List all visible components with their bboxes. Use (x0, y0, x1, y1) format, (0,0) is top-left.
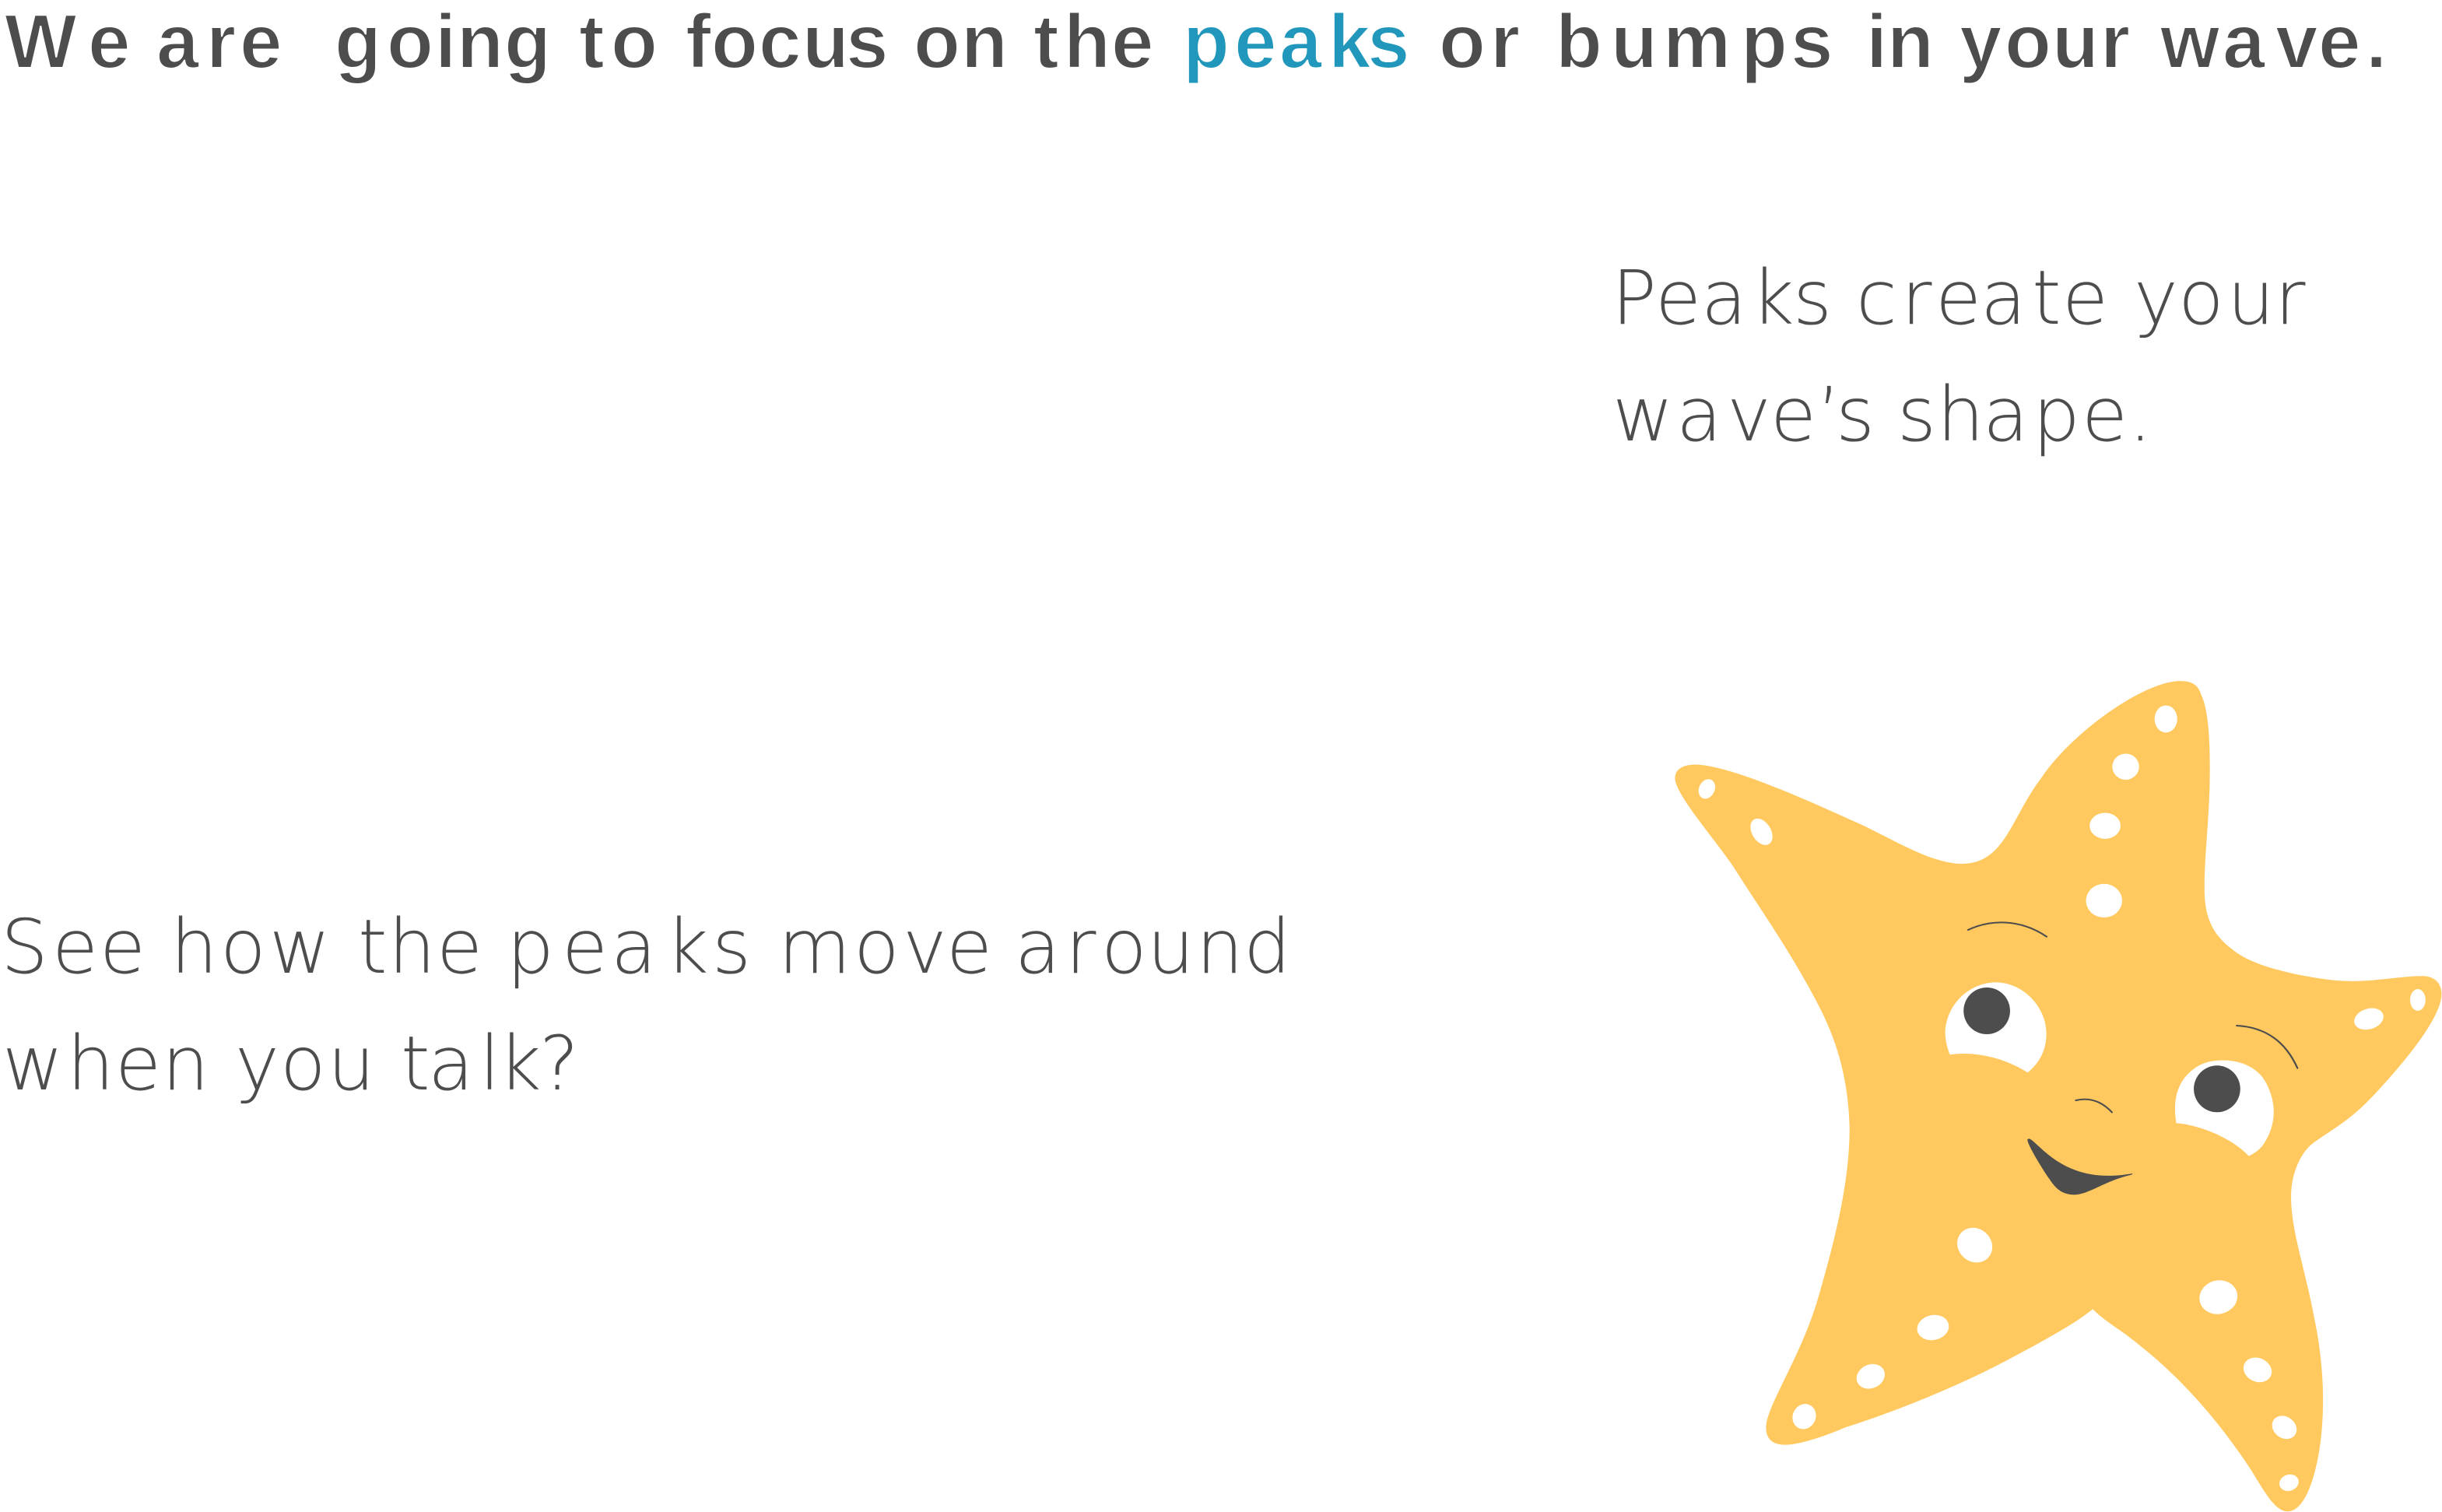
title: bumps (1556, 0, 1833, 84)
title: going (335, 0, 551, 84)
text block: peaks move: See (1, 903, 146, 991)
title: in (1866, 0, 1934, 84)
right eye (2175, 1061, 2274, 1156)
starfish body and spots (1675, 681, 2441, 1511)
text block: peaks move: you (235, 1020, 375, 1107)
text block: peaks move: around (1015, 903, 1291, 991)
text block: peaks create shape: shape. (1897, 371, 2153, 458)
title: We (5, 0, 131, 84)
title: your (1960, 0, 2130, 84)
text block: peaks create shape: wave’s (1612, 371, 1875, 458)
icon: starfish (1675, 681, 2441, 1511)
title: the (1033, 0, 1154, 84)
text block: peaks move: talk? (401, 1020, 579, 1107)
eyebrows and nose (1968, 922, 2297, 1112)
title: to (579, 0, 658, 84)
text block: peaks move: when (2, 1020, 209, 1107)
text block: peaks create shape (1612, 254, 2306, 458)
title: peaks (1183, 0, 1410, 84)
title: or (1439, 0, 1520, 84)
text block: peaks move: peaks (507, 903, 751, 991)
text block: peaks create shape: create (1856, 254, 2108, 342)
title: wave. (2160, 0, 2387, 84)
starfish face (1946, 922, 2297, 1195)
text block: peaks create shape: your (2134, 254, 2306, 342)
text block: peaks move (1, 903, 1291, 1107)
title: focus (686, 0, 889, 84)
text block: peaks move: move (778, 903, 992, 991)
text block: peaks move: the (358, 903, 482, 991)
title: are (156, 0, 282, 84)
mouth (2027, 1138, 2132, 1195)
left eye (1946, 982, 2047, 1072)
text block: peaks move: how (170, 903, 331, 991)
title: on (914, 0, 1008, 84)
text block: peaks create shape: Peaks (1612, 254, 1832, 342)
